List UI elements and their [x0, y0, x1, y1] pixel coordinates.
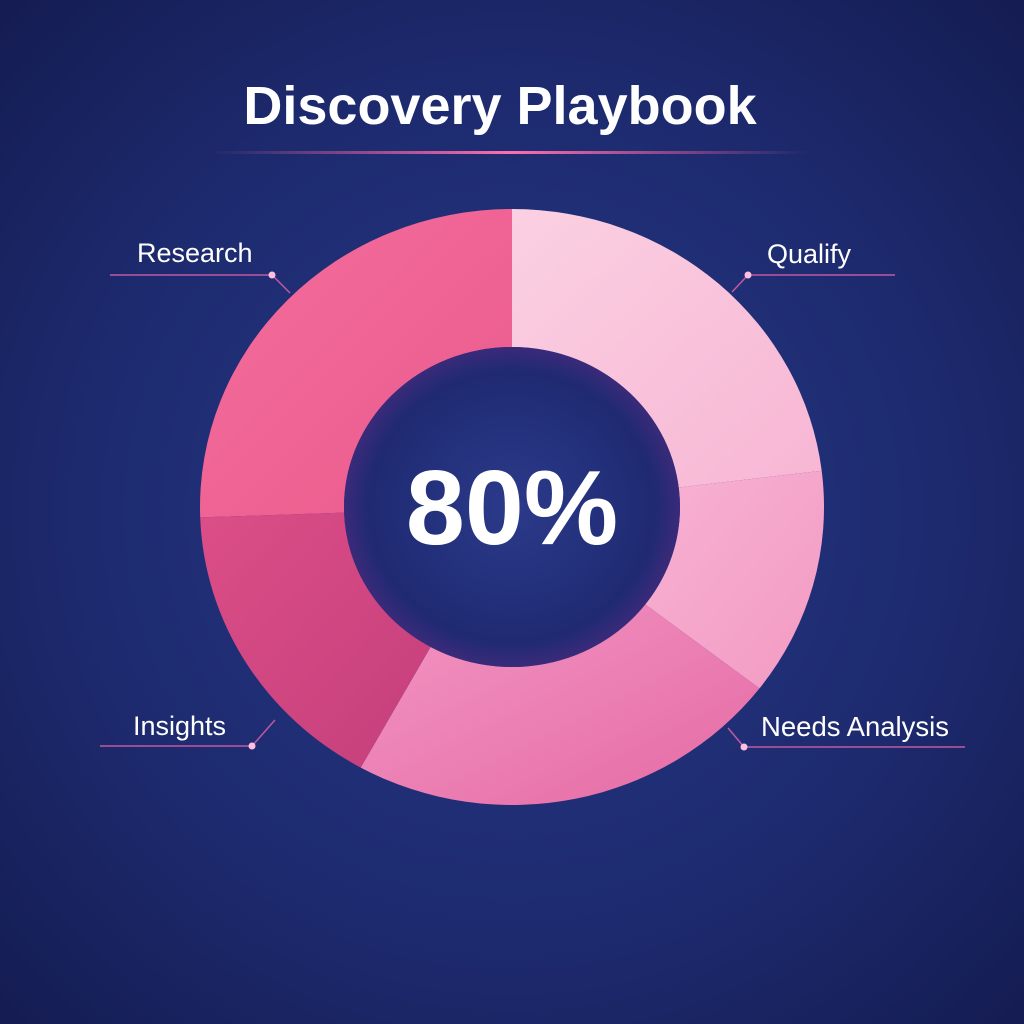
label: research [110, 238, 290, 293]
label: qualify [732, 239, 895, 292]
label: qualify: Qualify [767, 239, 852, 269]
segment: research [200, 209, 512, 517]
title: Discovery Playbook [243, 76, 758, 136]
donut chart [200, 209, 824, 805]
label: insights: Insights [133, 711, 226, 741]
segment: needs analysis [645, 471, 824, 688]
label: insights [100, 711, 275, 750]
label: needs analysis [728, 711, 965, 750]
center value: 80% [406, 449, 618, 567]
label: research: Research [137, 238, 253, 268]
segment: bottom [361, 604, 760, 805]
center hole [344, 347, 680, 667]
segment: insights [200, 513, 431, 768]
segment: qualify [512, 209, 822, 488]
label: needs analysis: Needs Analysis [761, 711, 949, 742]
